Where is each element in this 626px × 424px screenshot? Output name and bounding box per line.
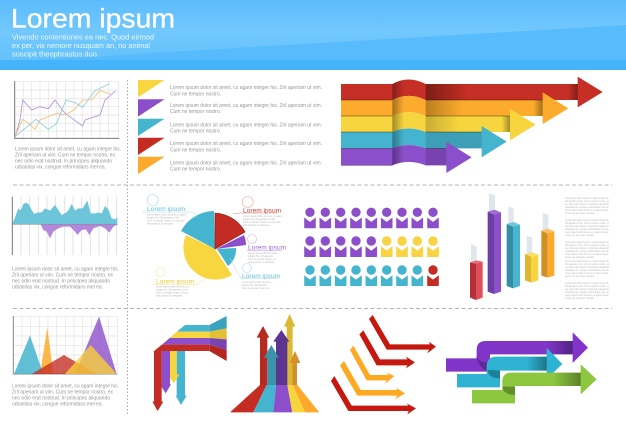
pie label teal top: integre his. Zril aperiam ut vim. bbox=[147, 216, 180, 220]
line chart caption bbox=[15, 146, 121, 170]
bar chart side text: Lorem ipsum dolor sit amet, cu agam integre. bbox=[565, 294, 609, 297]
header subtitle: Vivendo contentiones ea nec. Quod eirmod bbox=[12, 32, 154, 42]
bar chart side text: urbanitas vix, congue reformidans mel ea. bbox=[565, 228, 609, 231]
bar chart side text: nec odio erat nostrud. In principes aliquando bbox=[565, 266, 610, 269]
bar chart side text: Lorem ipsum dolor sit amet, cu agam integre his. bbox=[565, 241, 609, 244]
stacked ribbon arrows bbox=[341, 77, 603, 173]
header subtitle: suscipit theophrastus duo. bbox=[12, 50, 99, 58]
pie label purple: Lorem ipsum dolor sit amet, bbox=[248, 252, 278, 255]
bar chart side text: urbanitas vix, congue reformidans mel ea. bbox=[565, 206, 609, 209]
arrow teal bbox=[176, 351, 187, 405]
bar chart side text: Lorem ipsum dolor sit amet, cu agam integre. bbox=[565, 231, 609, 234]
ribbon arrow green bbox=[472, 364, 597, 403]
pie label purple: erat nostrud. In principes. bbox=[248, 261, 275, 264]
3D bar chart bbox=[470, 193, 554, 300]
pie slice purple bbox=[216, 235, 246, 249]
line chart bbox=[15, 81, 119, 138]
arrow yellow bbox=[168, 351, 179, 383]
orange arrow bbox=[341, 92, 568, 124]
bar chart side text: Cum ne tempor nostro. bbox=[565, 297, 595, 300]
people row two bbox=[304, 236, 439, 257]
bar chart side text: Lorem ipsum dolor sit amet, cu agam integre his. bbox=[565, 197, 609, 200]
arrow dark purple bbox=[273, 330, 289, 385]
bar chart side text: Cum ne tempor nostro. bbox=[565, 256, 595, 259]
pie label yellow: Lorem ipsum bbox=[156, 278, 195, 286]
bar chart side text: nec odio erat nostrud. In principes aliquando bbox=[565, 225, 610, 228]
bar chart side text: urbanitas vix, congue reformidans mel ea. bbox=[565, 250, 609, 253]
legend item teal: Lorem ipsum dolor sit amet, cu agam integre his. Zril aperiam ut vim. bbox=[170, 122, 322, 128]
bar chart side text: Zril aperiam ut vim. Cum ne tempor nostro, ex bbox=[565, 200, 610, 203]
bar chart side text: urbanitas vix, congue reformidans mel ea. bbox=[565, 291, 609, 294]
legend item yellow: Cum ne tempor nostro. bbox=[170, 92, 221, 98]
pie label teal top: erat nostrud. In principes. bbox=[147, 222, 174, 226]
pie label teal top: Lorem ipsum bbox=[147, 206, 186, 213]
wave area chart bbox=[12, 197, 118, 255]
bar chart side text: Lorem ipsum dolor sit amet, cu agam integre his. bbox=[565, 282, 609, 285]
line chart caption: Lorem ipsum dolor sit amet, cu agam integre his. bbox=[15, 146, 121, 152]
chevron red second bbox=[359, 330, 415, 368]
legend item purple: Cum ne tempor nostro. bbox=[170, 109, 221, 115]
pie slice red bbox=[215, 213, 245, 249]
bar red bbox=[470, 244, 483, 300]
wave chart caption: Zril aperiam ut vim. Cum ne tempor nostro, ex bbox=[12, 272, 113, 278]
pie slice teal small bbox=[217, 248, 236, 266]
arrow yellow bbox=[284, 314, 295, 385]
pie label teal top: Cum ne tempor nostro, ex nec odio bbox=[147, 220, 185, 222]
pie label red: Lorem ipsum bbox=[243, 208, 282, 214]
base stripes bbox=[230, 385, 319, 412]
legend item orange bbox=[138, 157, 322, 174]
wave chart caption: Lorem ipsum dolor sit amet, cu agam integre his. bbox=[12, 266, 119, 272]
wave chart caption: urbanitas vix, congue reformidans mel ea. bbox=[12, 284, 103, 290]
legend item purple: Lorem ipsum dolor sit amet, cu agam integre his. Zril aperiam ut vim. bbox=[170, 103, 322, 109]
bar chart side text: Zril aperiam ut vim. Cum ne tempor nostro, ex bbox=[565, 244, 610, 247]
pie label purple: integre his. Zril aperiam. bbox=[248, 255, 274, 258]
title: Lorem ipsum bbox=[11, 4, 175, 34]
pie label teal bottom: Lorem ipsum dolor sit amet, bbox=[242, 281, 272, 284]
header banner bbox=[0, 0, 626, 70]
bar chart side text: Cum ne tempor nostro. bbox=[565, 275, 595, 278]
bar chart side text bbox=[565, 197, 610, 300]
bar chart side text: nec odio erat nostrud. In principes aliquando bbox=[565, 288, 610, 291]
triangle chart caption: urbanitas vix, congue reformidans mel ea. bbox=[12, 402, 103, 408]
chevron orange fourth bbox=[340, 361, 405, 399]
chevron orange third bbox=[350, 346, 394, 384]
arrow red bbox=[152, 351, 163, 411]
triangle chart caption bbox=[12, 384, 119, 408]
bar chart side text: Cum ne tempor nostro. bbox=[565, 234, 595, 237]
pie label purple: Lorem ipsum bbox=[248, 245, 287, 252]
legend item red: Cum ne tempor nostro. bbox=[170, 147, 221, 153]
pie label teal top: Lorem ipsum dolor sit amet, cu agam bbox=[147, 214, 186, 216]
arrow red bbox=[257, 326, 269, 385]
pie label teal bottom: Cum ne tempor nostro, ex bbox=[242, 287, 270, 290]
ribbon arrow teal bbox=[457, 348, 562, 387]
bar chart side text: Lorem ipsum dolor sit amet, cu agam integre his. bbox=[565, 219, 609, 222]
bar chart side text: Cum ne tempor nostro. bbox=[565, 212, 595, 215]
pie label purple: Cum ne tempor nostro, ex bbox=[248, 258, 276, 261]
folded ribbon down arrows bbox=[152, 316, 227, 411]
bar purple bbox=[488, 193, 501, 294]
pie label red bbox=[233, 196, 282, 227]
people row one bbox=[304, 208, 439, 228]
header subtitle: ex per, vix nemore nusquam an, no animal bbox=[12, 41, 150, 50]
chevron red top bbox=[369, 315, 436, 353]
legend item orange: Cum ne tempor nostro. bbox=[170, 166, 221, 172]
legend item red bbox=[138, 138, 322, 155]
pie label teal bottom bbox=[230, 258, 281, 290]
pie label red: Cum ne tempor nostro, ex nec odio bbox=[243, 221, 281, 224]
wave chart caption bbox=[12, 266, 119, 290]
line chart caption: urbanitas vix, congue reformidans mel ea. bbox=[15, 164, 106, 170]
legend item yellow: Lorem ipsum dolor sit amet, cu agam integre his. Zril aperiam ut vim. bbox=[170, 85, 322, 91]
pie label red: erat nostrud. In principes. bbox=[243, 224, 270, 227]
bar chart side text: urbanitas vix, congue reformidans mel ea. bbox=[565, 269, 609, 272]
bar teal bbox=[507, 207, 520, 288]
people row three bbox=[304, 265, 439, 286]
triangle chart caption: Lorem ipsum dolor sit amet, cu agam integre his. bbox=[12, 384, 119, 390]
ribbon flat stripes bbox=[154, 325, 209, 351]
bar chart side text: Zril aperiam ut vim. Cum ne tempor nostro, ex bbox=[565, 285, 610, 288]
arrow purple bbox=[160, 351, 171, 393]
wave chart caption: nec odio erat nostrud. In principes aliquando bbox=[12, 278, 110, 284]
line chart caption: Zril aperiam ut vim. Cum ne tempor nostro, ex bbox=[15, 152, 115, 158]
pie label yellow: integre his. Zril aperiam ut vim. bbox=[156, 288, 189, 292]
pie label yellow bbox=[153, 268, 207, 298]
chevron arrows bbox=[331, 315, 436, 414]
pie label red: integre his. Zril aperiam ut vim. bbox=[243, 218, 276, 221]
purple arrow bbox=[341, 142, 472, 173]
bar chart side text: Lorem ipsum dolor sit amet, cu agam integre his. bbox=[565, 260, 609, 263]
pie slice yellow bbox=[183, 235, 232, 280]
pie label purple bbox=[247, 234, 287, 264]
pie label teal bottom: integre his. Zril aperiam. bbox=[242, 284, 268, 287]
ribbon arrow purple bbox=[446, 332, 588, 372]
legend item yellow bbox=[138, 80, 322, 98]
chevron red bottom bbox=[331, 376, 416, 414]
pie slice teal large bbox=[181, 211, 215, 249]
bar chart side text: Lorem ipsum dolor sit amet, cu agam integre. bbox=[565, 272, 609, 275]
triangle chart caption: Zril aperiam ut vim. Cum ne tempor nostro, ex bbox=[12, 390, 113, 396]
triangle area chart bbox=[13, 316, 117, 374]
legend list bbox=[138, 80, 322, 174]
pie label yellow: Lorem ipsum dolor sit amet, cu bbox=[156, 286, 189, 288]
bar yellow bbox=[525, 236, 538, 283]
bar chart side text: Lorem ipsum dolor sit amet, cu agam integre. bbox=[565, 209, 609, 212]
legend item red: Lorem ipsum dolor sit amet, cu agam integre his. Zril aperiam ut vim. bbox=[170, 141, 322, 147]
arrow teal bbox=[264, 345, 279, 385]
bar chart side text: Lorem ipsum dolor sit amet, cu agam integre. bbox=[565, 253, 609, 256]
pie label red: Lorem ipsum dolor sit amet, cu agam bbox=[243, 215, 282, 218]
legend item teal bbox=[138, 119, 322, 136]
ribbon flap bbox=[209, 316, 227, 361]
yellow arrow bbox=[341, 109, 536, 140]
legend item teal: Cum ne tempor nostro. bbox=[170, 128, 221, 134]
pie label teal bottom: Lorem ipsum bbox=[242, 273, 281, 280]
bar chart side text: Zril aperiam ut vim. Cum ne tempor nostro, ex bbox=[565, 263, 610, 266]
perspective up arrows bbox=[230, 314, 319, 412]
header subtitle bbox=[12, 32, 154, 58]
pie label yellow: erat nostrud. In principes. bbox=[156, 294, 183, 298]
pie label yellow: Cum ne tempor nostro, ex nec bbox=[156, 292, 189, 294]
teal arrow bbox=[341, 126, 507, 157]
legend item purple bbox=[138, 99, 322, 117]
bar orange bbox=[541, 213, 554, 278]
line chart caption: nec odio erat nostrud. In principes aliquando bbox=[15, 158, 112, 164]
triangle chart caption: nec odio erat nostrud. In principes aliquando bbox=[12, 396, 110, 402]
bar chart side text: Zril aperiam ut vim. Cum ne tempor nostro, ex bbox=[565, 222, 610, 225]
pie chart bbox=[181, 211, 246, 280]
red arrow bbox=[341, 77, 603, 107]
interwoven ribbon arrows bbox=[446, 332, 597, 403]
arrow orange bbox=[290, 351, 300, 385]
bar chart side text: nec odio erat nostrud. In principes aliquando bbox=[565, 247, 610, 250]
legend item orange: Lorem ipsum dolor sit amet, cu agam integre his. Zril aperiam ut vim. bbox=[170, 160, 322, 166]
bar chart side text: nec odio erat nostrud. In principes aliquando bbox=[565, 203, 610, 206]
pie label teal top bbox=[142, 194, 197, 226]
